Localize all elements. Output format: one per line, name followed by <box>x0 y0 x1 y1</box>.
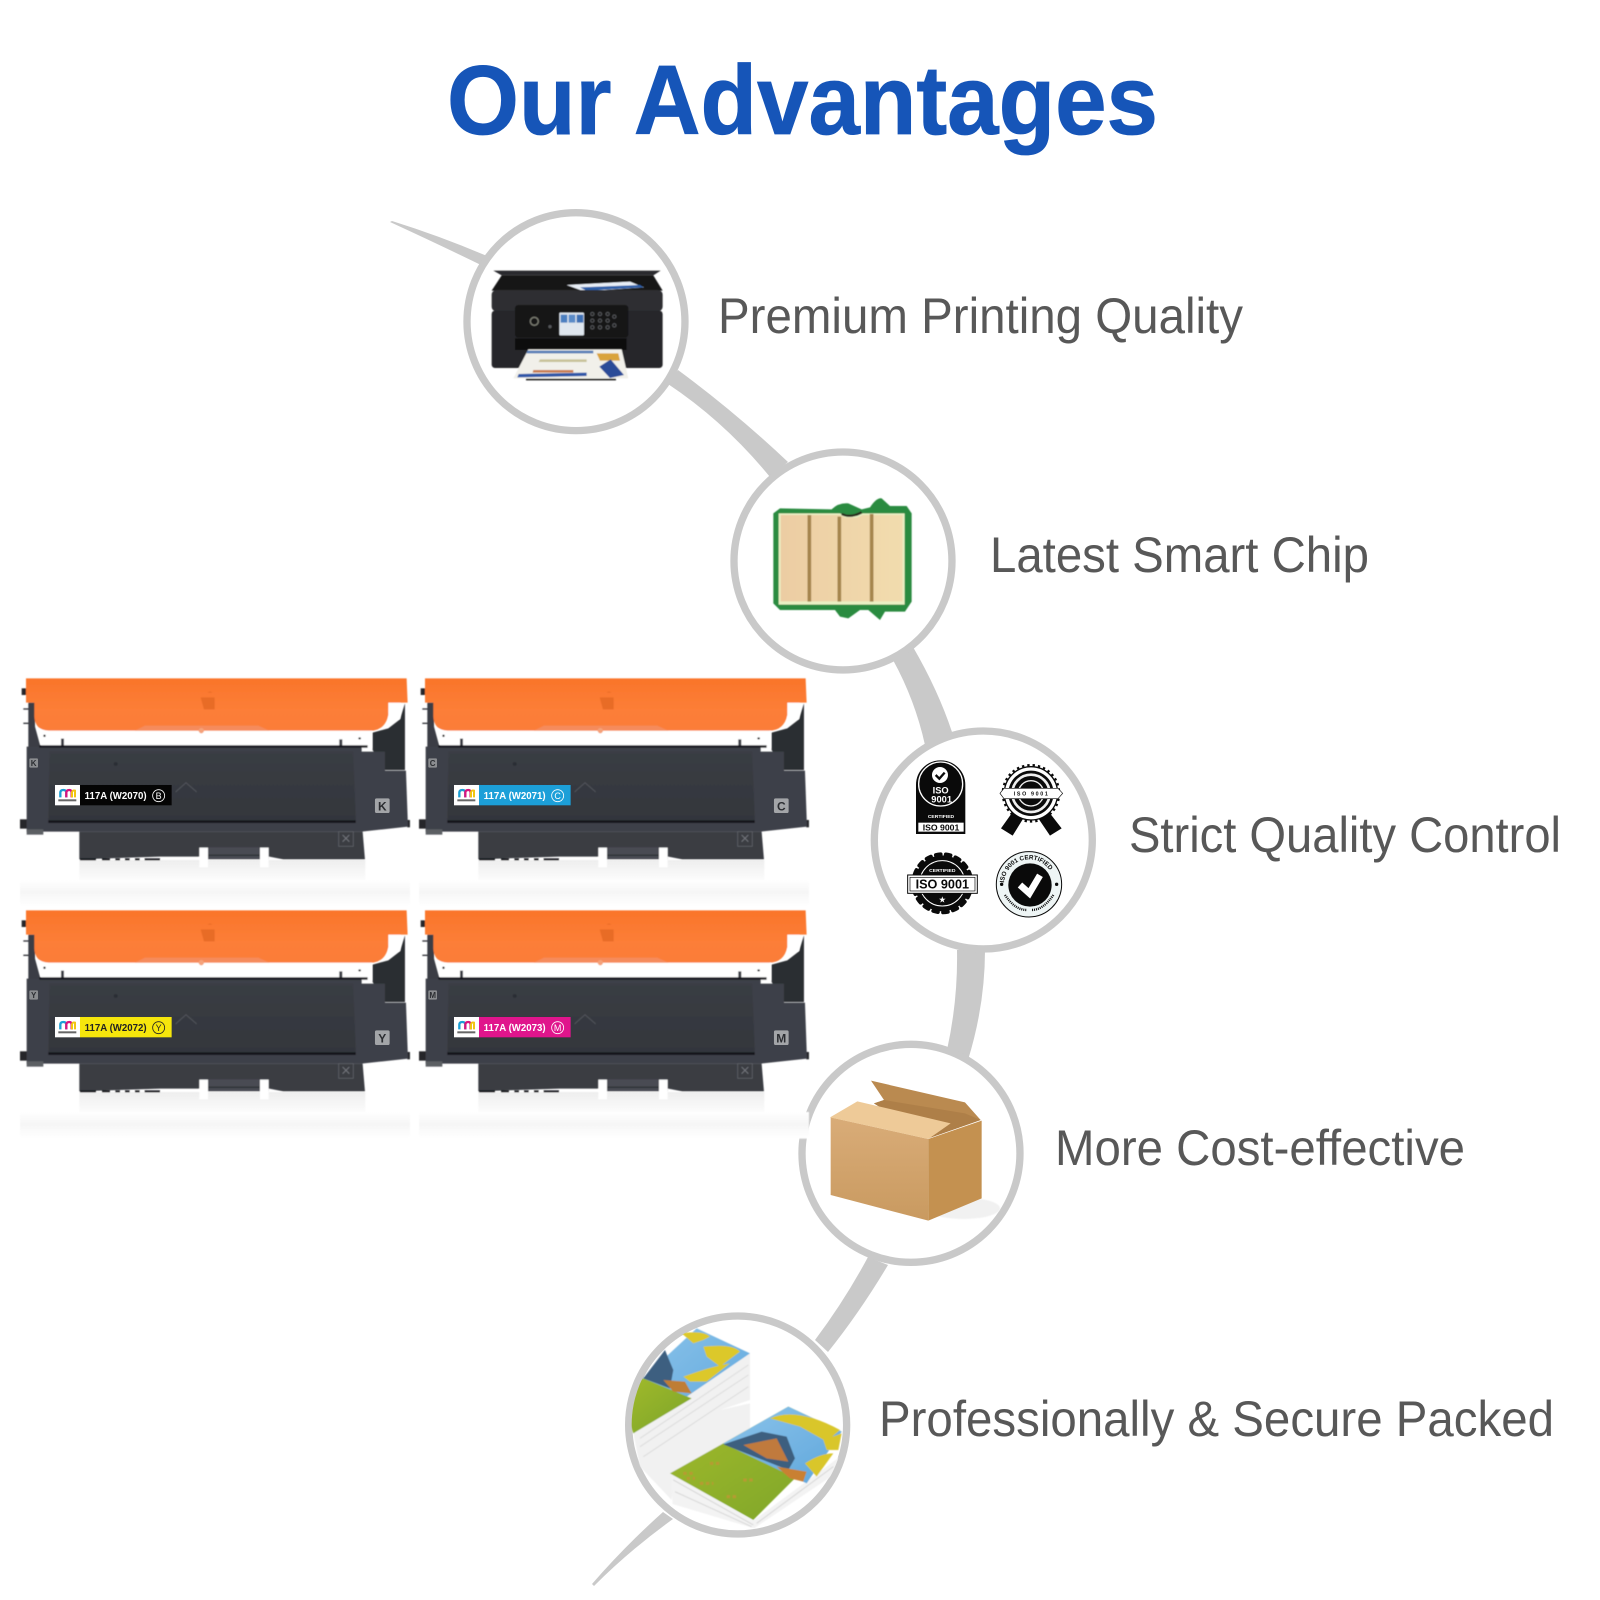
badge: ISO seal <box>908 854 977 912</box>
label: yellow: Y <box>156 1023 162 1033</box>
circle: quality control <box>870 727 1096 952</box>
label: black <box>55 785 172 805</box>
badge: ISO certified shield: ISO <box>933 785 949 795</box>
side tile: K: K <box>31 759 37 768</box>
badge: ISO seal: ISO 9001 <box>916 878 969 892</box>
icon: chip <box>773 498 912 620</box>
label: cyan: C <box>554 791 561 801</box>
label: cyan: 117A (W2071) <box>484 791 546 802</box>
badge: ISO certified shield: 9001 <box>931 794 952 804</box>
icon: cardboard box <box>830 1081 1000 1221</box>
badge: ISO check seal <box>996 851 1062 918</box>
side tile: Y: Y <box>378 1031 386 1045</box>
label: magenta: M <box>554 1023 561 1033</box>
label: black: B <box>156 791 162 801</box>
side tile: C: C <box>777 799 786 813</box>
label: magenta: 117A (W2073) <box>484 1023 546 1034</box>
icon: printer <box>492 271 663 380</box>
circle: smart chip <box>734 452 952 670</box>
side tile: K <box>29 758 390 813</box>
cartridge: magenta <box>419 910 809 1139</box>
label: cyan <box>454 785 571 805</box>
cartridge: yellow <box>20 910 410 1139</box>
side tile: M <box>428 990 789 1045</box>
badge: ISO check seal: ISO 9001 CERTIFIED <box>1000 854 1052 882</box>
badge: ISO certified shield <box>917 761 965 833</box>
title: Our Advantages <box>447 45 1158 155</box>
label: strict quality control: Strict Quality Control <box>1129 807 1561 863</box>
label: latest smart chip: Latest Smart Chip <box>990 527 1369 583</box>
label: professionally and secure packed: Professionally & Secure Packed <box>879 1391 1554 1447</box>
label: yellow <box>55 1017 172 1037</box>
badge: ISO seal: ★ <box>938 894 946 904</box>
icon: paper stacks <box>620 1328 842 1528</box>
connector curve <box>390 221 985 1586</box>
side tile: M: M <box>776 1031 786 1045</box>
circle: packed <box>620 1316 847 1534</box>
side tile: Y <box>29 990 390 1045</box>
side tile: K: K <box>378 799 387 813</box>
label: magenta <box>454 1017 571 1037</box>
circle: cost-effective <box>802 1044 1020 1262</box>
cartridge: black <box>20 678 410 907</box>
side tile: C <box>428 758 789 813</box>
badge: ISO certified shield: ISO 9001 <box>923 822 959 832</box>
badge: ISO seal: CERTIFIED <box>929 868 956 874</box>
circle: printer <box>467 213 685 431</box>
side tile: C: C <box>430 759 436 768</box>
side tile: M: M <box>429 991 436 1000</box>
label: more cost-effective: More Cost-effective <box>1055 1120 1465 1176</box>
cartridge: cyan <box>419 678 809 907</box>
label: black: 117A (W2070) <box>85 791 147 802</box>
badge: ISO certified shield: CERTIFIED <box>928 814 955 820</box>
label: premium printing quality: Premium Printing Quality <box>718 288 1243 344</box>
side tile: Y: Y <box>31 991 37 1000</box>
badge: ISO rosette <box>1000 765 1063 836</box>
badge: ISO rosette: ISO 9001 <box>1014 792 1050 798</box>
label: yellow: 117A (W2072) <box>85 1023 147 1034</box>
